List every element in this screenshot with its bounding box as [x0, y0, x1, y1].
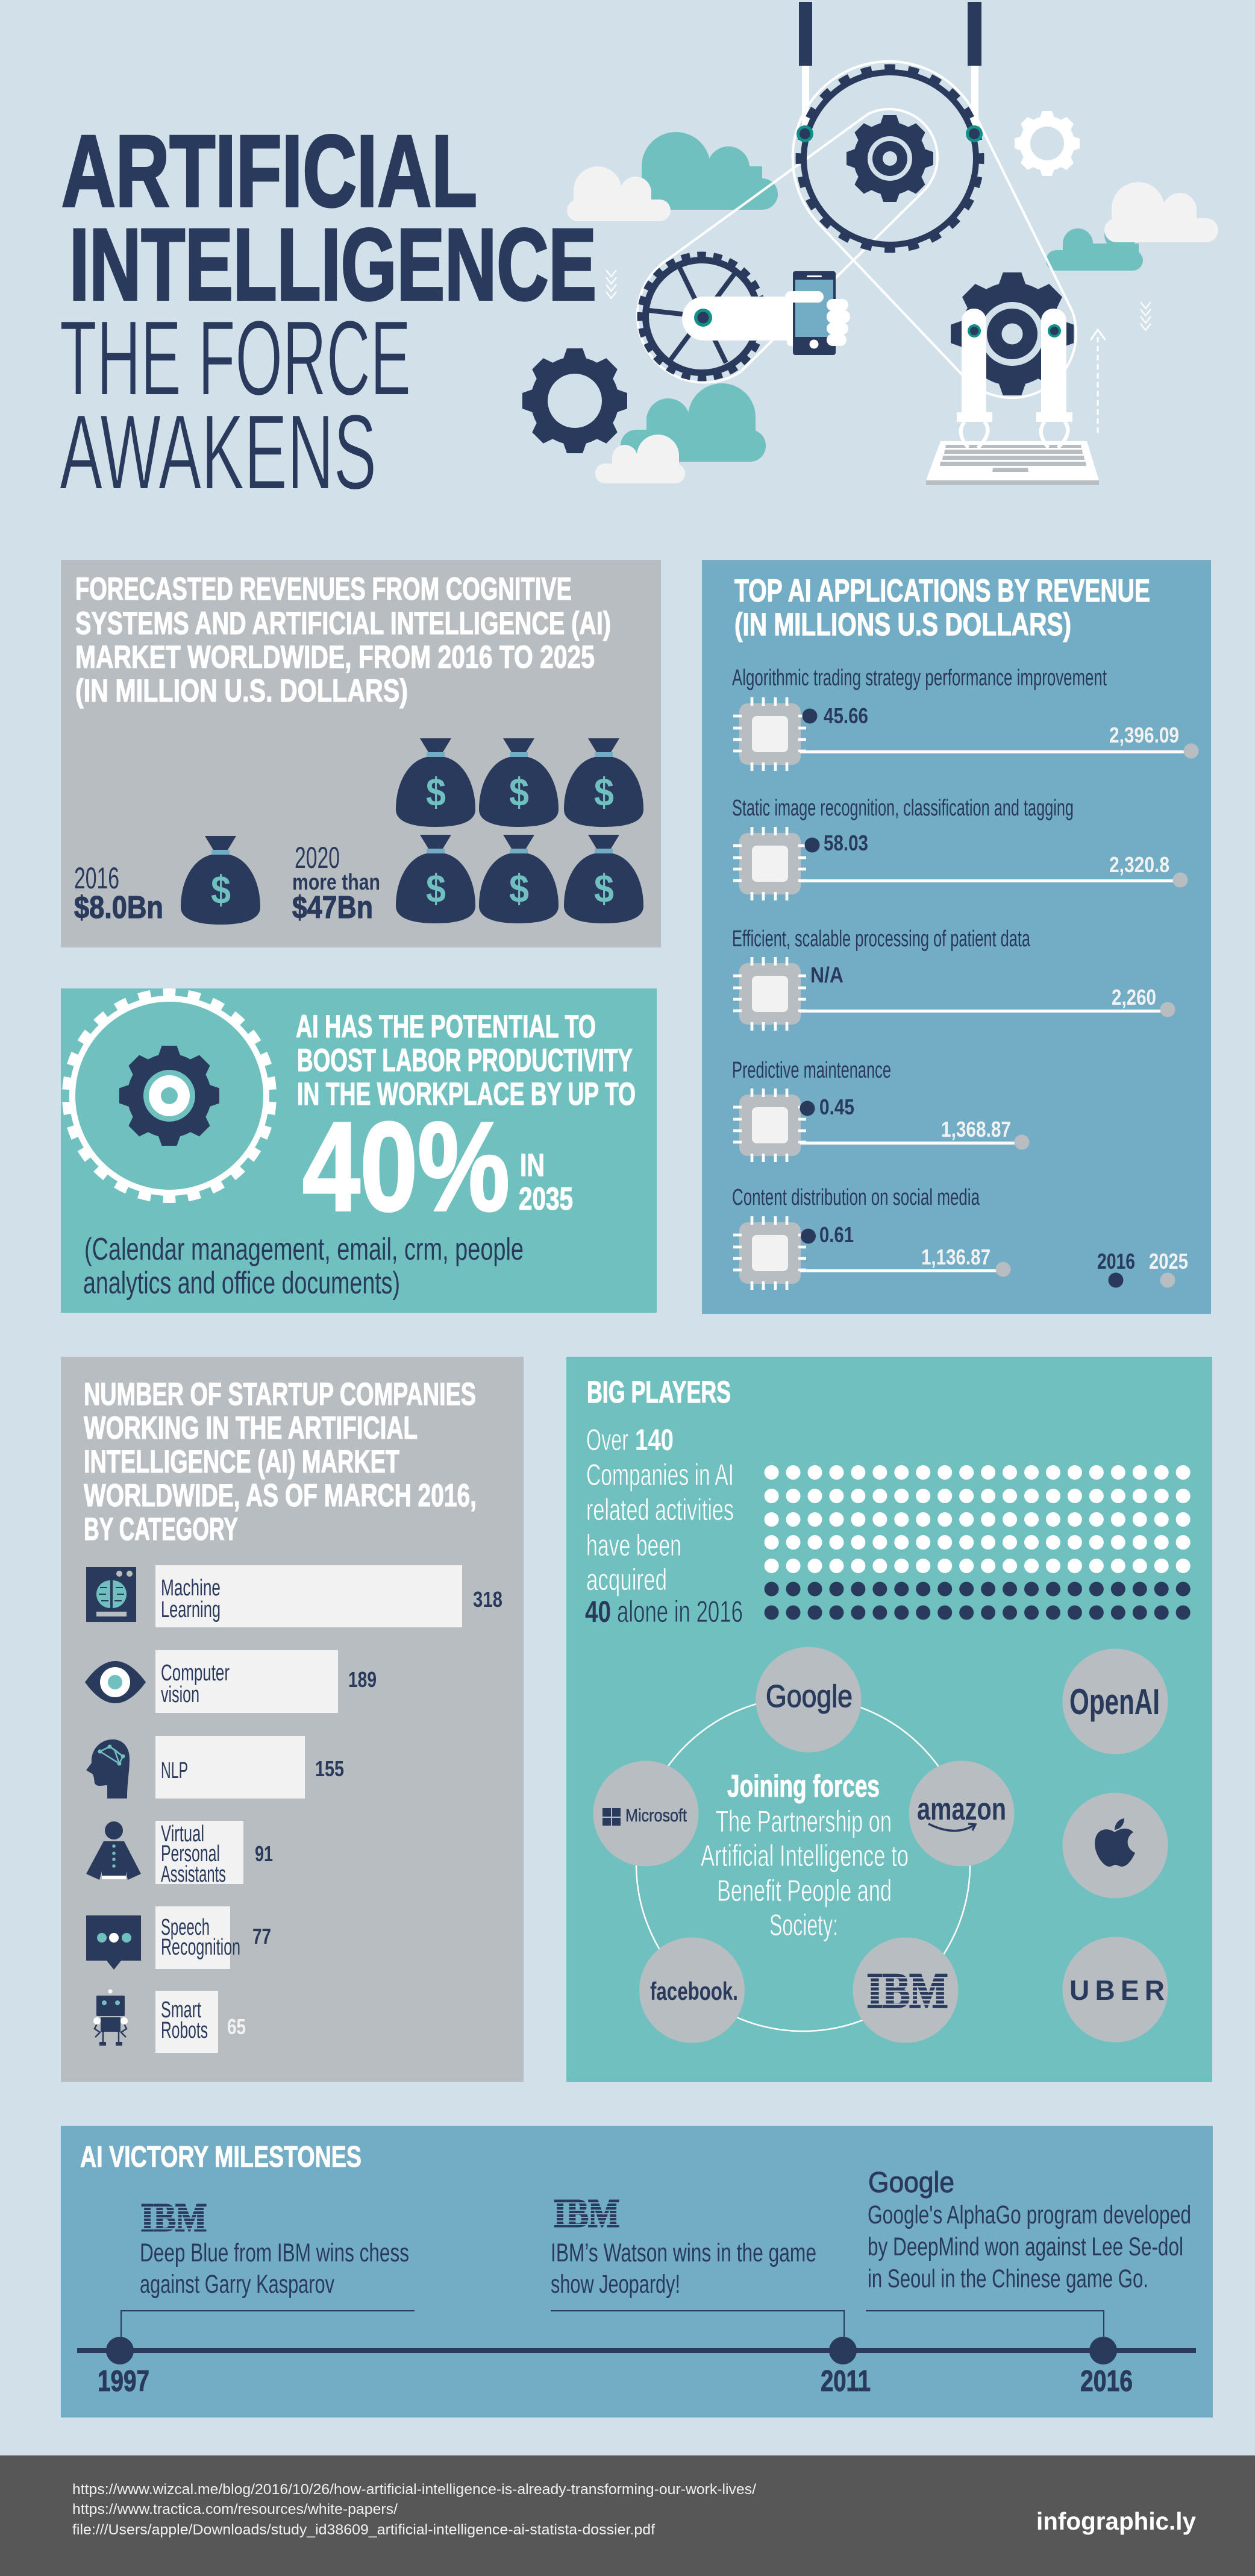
- heading: startups: WORLDWIDE, AS OF MARCH 2016,: [84, 1478, 477, 1513]
- bar: machine learning: Learning: [161, 1597, 221, 1623]
- heading: startups: BY CATEGORY: [84, 1512, 238, 1547]
- row: predictive maintenance: Predictive maintenance: [732, 1058, 891, 1083]
- logo: IBM: IBM: [867, 1963, 948, 2018]
- sources: https://www.wizcal.me/blog/2016/10/26/how-artificial-intelligence-is-already-transforming-our-work-lives/: [72, 2481, 756, 2498]
- stat: 2016 revenue: [74, 861, 163, 925]
- title: [60, 114, 596, 512]
- logo: Uber: UBER: [1069, 1974, 1165, 2006]
- heading: forecasted revenues: FORECASTED REVENUES FROM COGNITIVE: [75, 571, 572, 607]
- text: acquisitions: have been: [586, 1528, 681, 1562]
- icon: robot: [93, 1989, 128, 2046]
- cloud: upper teal: [642, 132, 778, 210]
- row: predictive maintenance: [732, 1058, 1029, 1162]
- icon: money bag 2016: $: [211, 867, 231, 912]
- row: social media: [732, 1185, 1011, 1290]
- bar: speech recognition: Recognition: [161, 1935, 240, 1960]
- cloud: right white: [1104, 182, 1218, 242]
- stat: 2020 revenue: [292, 841, 380, 925]
- row: static image recognition: 2,320.8: [1109, 852, 1169, 877]
- heading: milestones: AI VICTORY MILESTONES: [80, 2141, 361, 2173]
- row: social media: 1,136.87: [921, 1245, 991, 1269]
- milestone: Deep Blue: IBM: [141, 2196, 207, 2240]
- panel: forecasted revenues: [61, 560, 661, 947]
- partnership ring: [636, 1697, 970, 2031]
- timeline: 1997: [98, 2365, 149, 2398]
- milestone: AlphaGo: Google: [868, 2167, 954, 2199]
- text: joining forces: Joining forces: [727, 1769, 880, 1804]
- stat: 40 percent in 2035: 40%: [302, 1096, 510, 1237]
- heading: startups: WORKING IN THE ARTIFICIAL: [84, 1410, 418, 1446]
- row: static image recognition: 58.03: [824, 831, 868, 855]
- text: examples: (Calendar management, email, crm, people: [84, 1232, 524, 1267]
- text: joining forces: Benefit People and: [717, 1874, 892, 1908]
- dot grid: 140 companies, 40 in 2016: [772, 1472, 1183, 1613]
- bar: NLP: [155, 1736, 344, 1798]
- bar: machine learning: Machine: [161, 1575, 221, 1601]
- text: acquisitions: [585, 1423, 743, 1629]
- text: acquisitions: related activities: [586, 1493, 734, 1527]
- bar: NLP: NLP: [161, 1758, 188, 1783]
- row: patient data: [732, 926, 1175, 1031]
- icon group: money bags 2020: $: [509, 770, 529, 814]
- legend: 2016: [1097, 1249, 1135, 1274]
- heading: potential: [296, 1009, 636, 1112]
- bar: virtual personal assistants: Virtual: [161, 1821, 204, 1847]
- cloud: lower teal: [621, 383, 766, 462]
- bar: smart robots: 65: [227, 2014, 246, 2039]
- row: predictive maintenance: 1,368.87: [941, 1117, 1011, 1142]
- bar: computer vision: vision: [161, 1682, 199, 1707]
- milestone: Deep Blue: [137, 2196, 409, 2299]
- heading: top AI applications: (IN MILLIONS U.S DOLLARS): [734, 607, 1071, 642]
- bar: smart robots: Smart: [161, 1997, 201, 2023]
- logo: Amazon: [909, 1761, 1015, 1866]
- text: joining forces: Society:: [769, 1908, 838, 1942]
- logo: OpenAI: [1063, 1649, 1168, 1754]
- icon: speech bubble: [86, 1915, 141, 1970]
- milestone: Watson: IBM: [554, 2191, 619, 2235]
- laptop: [926, 441, 1099, 485]
- timeline: [77, 2311, 1196, 2398]
- text: joining forces: The Partnership on: [716, 1805, 892, 1838]
- heading: startups: INTELLIGENCE (AI) MARKET: [84, 1444, 399, 1480]
- logo: Uber: [1063, 1937, 1168, 2042]
- text: acquisitions: 40: [585, 1595, 611, 1629]
- panel: top AI applications: [702, 560, 1211, 1314]
- icon group: money bags 2020: $: [426, 866, 446, 911]
- row: static image recognition: Static image recognition, classification and tagging: [732, 796, 1074, 821]
- logo: Google: [756, 1647, 862, 1753]
- text: acquisitions: acquired: [586, 1563, 667, 1597]
- hanger bars: [799, 2, 981, 129]
- sources: file:///Users/apple/Downloads/study_id38609_artificial-intelligence-ai-statista-dossier.pdf: [72, 2522, 655, 2538]
- row: predictive maintenance: 0.45: [819, 1095, 854, 1119]
- row: static image recognition: [732, 796, 1188, 900]
- chevrons: left: [606, 270, 616, 298]
- heading: startups: NUMBER OF STARTUP COMPANIES: [84, 1377, 476, 1412]
- cloud: upper white: [567, 166, 671, 221]
- text: acquisitions: alone in 2016: [617, 1595, 743, 1629]
- bar: machine learning: [155, 1565, 502, 1627]
- bar: computer vision: 189: [348, 1667, 377, 1692]
- icon: machine learning brain: [86, 1567, 136, 1622]
- row: patient data: 2,260: [1112, 985, 1156, 1010]
- milestone: Watson: IBM’s Watson wins in the game: [551, 2238, 816, 2267]
- phone and hand: [682, 271, 850, 355]
- title: THE FORCE: [60, 298, 411, 418]
- row: algorithmic trading: [732, 665, 1199, 771]
- heading: startups: [84, 1377, 477, 1547]
- row: patient data: N/A: [810, 963, 843, 987]
- cloud: right teal: [1046, 218, 1143, 271]
- bar: computer vision: Computer: [161, 1660, 230, 1686]
- bar: speech recognition: Speech: [161, 1915, 210, 1940]
- hanger pivots: [797, 125, 983, 142]
- stat: 40 percent in 2035: 2035: [519, 1181, 573, 1217]
- row: algorithmic trading: 45.66: [824, 703, 868, 728]
- panel: labor productivity: [61, 988, 657, 1313]
- logo: Apple: [1063, 1792, 1168, 1899]
- gear: robot gear: [951, 272, 1074, 395]
- footer: [0, 2455, 1255, 2576]
- logo: Microsoft: Microsoft: [625, 1806, 687, 1826]
- logo: Google: Google: [766, 1679, 853, 1714]
- panel: startup companies: [61, 1357, 524, 2082]
- icon group: money bags 2020: $: [509, 866, 529, 911]
- heading: potential: BOOST LABOR PRODUCTIVITY: [297, 1043, 633, 1078]
- stat: 2016 revenue: $8.0Bn: [74, 890, 163, 925]
- heading: forecasted revenues: SYSTEMS AND ARTIFICIAL INTELLIGENCE (AI): [75, 606, 611, 641]
- row: algorithmic trading: 2,396.09: [1109, 723, 1179, 747]
- brand: infographic.ly: [1036, 2507, 1196, 2535]
- gear: small white: [1015, 111, 1080, 176]
- stat: 2020 revenue: $47Bn: [292, 890, 373, 925]
- panel: AI victory milestones: [61, 2126, 1213, 2417]
- text: acquisitions: Companies in AI: [586, 1458, 734, 1492]
- robot arms: [957, 309, 1072, 448]
- arrow: dashed up: [1091, 330, 1105, 433]
- bar: computer vision: [155, 1650, 377, 1713]
- stat: 2020 revenue: more than: [292, 870, 380, 894]
- icon group: money bags 2020: $: [594, 866, 614, 911]
- bar: virtual personal assistants: [155, 1821, 273, 1887]
- icon: gear: [66, 993, 272, 1199]
- logo: IBM: [853, 1937, 958, 2043]
- title: AWAKENS: [60, 392, 377, 512]
- milestone: Watson: show Jeopardy!: [551, 2270, 680, 2299]
- text: acquisitions: 140: [635, 1423, 674, 1457]
- icon: eye: [85, 1661, 146, 1703]
- gear: big wheel hub: [847, 115, 933, 202]
- stat: 40 percent in 2035: IN: [520, 1148, 545, 1183]
- hero illustration: gears, robot arms, clouds: [522, 2, 1218, 485]
- logo: Amazon: amazon: [917, 1792, 1006, 1827]
- text: examples: [83, 1232, 524, 1301]
- icon group: money bags 2020: $: [594, 770, 614, 814]
- icon: money bag 2016: [181, 836, 260, 925]
- logo: Facebook: [639, 1937, 745, 2043]
- stat: 2016 revenue: 2016: [74, 861, 119, 895]
- logo: Facebook: facebook.: [650, 1977, 738, 2005]
- panel: big players: [566, 1357, 1212, 2082]
- logo: Microsoft: [593, 1761, 699, 1866]
- legend: [1097, 1249, 1188, 1287]
- bar: virtual personal assistants: Assistants: [161, 1862, 226, 1887]
- milestone: Watson: [550, 2191, 816, 2299]
- heading: forecasted revenues: MARKET WORLDWIDE, FROM 2016 TO 2025: [75, 639, 595, 675]
- icon: head with network: [86, 1739, 130, 1798]
- milestone: Deep Blue: against Garry Kasparov: [140, 2270, 334, 2299]
- gear: lower-left navy: [522, 348, 627, 453]
- text: acquisitions: Over: [586, 1423, 628, 1457]
- bar: virtual personal assistants: Personal: [161, 1841, 220, 1867]
- gear: small wheel with spokes: [640, 254, 764, 379]
- bar: speech recognition: 77: [252, 1924, 271, 1949]
- bar: NLP: 155: [315, 1756, 344, 1781]
- row: patient data: Efficient, scalable processing of patient data: [732, 926, 1031, 952]
- row: social media: Content distribution on social media: [732, 1185, 980, 1210]
- stat: 2020 revenue: 2020: [295, 841, 340, 875]
- icon group: money bags 2020: [396, 738, 643, 923]
- text: examples: analytics and office documents): [83, 1266, 400, 1301]
- bar: smart robots: Robots: [161, 2018, 208, 2043]
- heading: forecasted revenues: [75, 571, 611, 709]
- row: social media: 0.61: [819, 1222, 854, 1247]
- title: ARTIFICIAL: [61, 114, 477, 228]
- bar: virtual personal assistants: 91: [255, 1841, 273, 1866]
- icon: virtual assistant person: [86, 1821, 141, 1880]
- bar: smart robots: [155, 1991, 246, 2053]
- cloud: lower white: [595, 435, 685, 483]
- belt: big wheel to robot gear: [793, 61, 1076, 398]
- heading: potential: AI HAS THE POTENTIAL TO: [296, 1009, 596, 1045]
- gear: big wheel: [799, 68, 981, 250]
- text: joining forces: Artificial Intelligence to: [701, 1839, 909, 1873]
- text: joining forces: [701, 1769, 909, 1942]
- timeline: 2011: [821, 2365, 871, 2398]
- heading: top AI applications: [734, 573, 1150, 642]
- bar: speech recognition: [155, 1906, 271, 1969]
- milestone: Deep Blue: Deep Blue from IBM wins chess: [140, 2238, 409, 2267]
- legend: 2025: [1149, 1249, 1188, 1274]
- chevrons: right: [1141, 302, 1151, 330]
- bar: machine learning: 318: [473, 1587, 502, 1612]
- icon group: money bags 2020: $: [426, 770, 446, 814]
- belt: hub to small wheel: [637, 109, 937, 383]
- heading: big players: BIG PLAYERS: [587, 1375, 731, 1409]
- milestone: AlphaGo: in Seoul in the Chinese game Go.: [868, 2264, 1148, 2293]
- logo: OpenAI: OpenAI: [1069, 1682, 1160, 1722]
- sources: [72, 2481, 756, 2538]
- heading: potential: IN THE WORKPLACE BY UP TO: [297, 1076, 636, 1112]
- timeline: 2016: [1080, 2365, 1133, 2398]
- title: INTELLIGENCE: [69, 207, 596, 321]
- heading: forecasted revenues: (IN MILLION U.S. DOLLARS): [75, 673, 408, 709]
- sources: https://www.tractica.com/resources/white-papers/: [72, 2501, 398, 2518]
- milestone: AlphaGo: [868, 2167, 1191, 2293]
